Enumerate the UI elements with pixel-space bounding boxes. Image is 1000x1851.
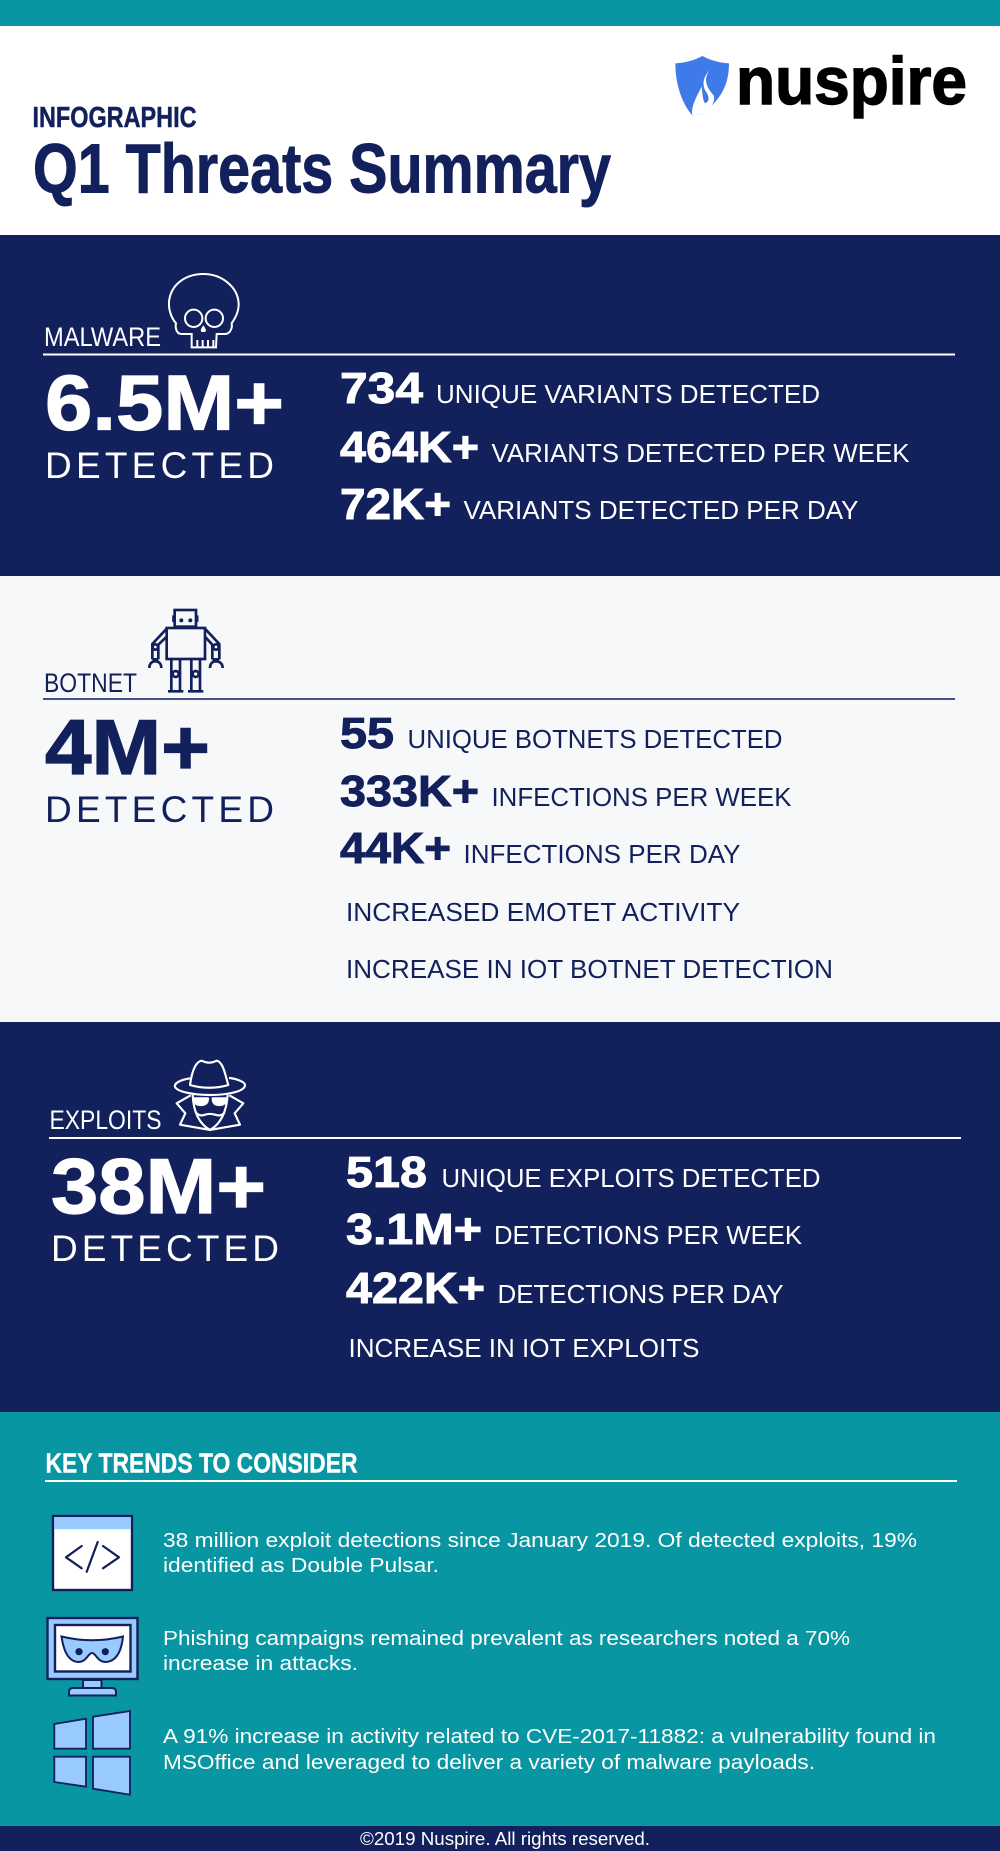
trend text: exploit detections: identified as Double Pulsar. [163,1554,439,1577]
icon: windows logo [54,1711,130,1795]
icon: skull [169,274,239,347]
logo wordmark: nuspire [736,44,967,119]
stat list: botnet [340,709,833,984]
trend text: CVE-2017-11882: A 91% increase in activity related to CVE-2017-11882: a vulnerability found in [163,1725,936,1748]
stat list: botnet: UNIQUE BOTNETS DETECTED [408,724,782,754]
heading: malware: MALWARE [44,322,161,352]
trend text: exploit detections: 38 million exploit detections since January 2019. Of detected exploits, 19% [163,1529,917,1552]
heading: key trends to consider: KEY TRENDS TO CONSIDER [46,1448,358,1478]
panel: exploits [0,1022,1000,1412]
icon: shield with flame [675,56,729,115]
header panel [0,26,1000,235]
stat list: botnet: 44K+ [340,824,451,873]
heading: exploits: EXPLOITS [50,1105,162,1135]
stat: total botnet detected [45,703,274,830]
stat list: botnet: INCREASED EMOTET ACTIVITY [346,897,740,927]
stat list: exploits: DETECTIONS PER DAY [498,1279,784,1309]
stat list: botnet: INFECTIONS PER WEEK [492,782,792,812]
footer: ©2019 Nuspire. All rights reserved. [360,1829,650,1849]
icon: phishing monitor [48,1618,138,1696]
stat list: exploits: UNIQUE EXPLOITS DETECTED [442,1163,820,1193]
stat list: malware: 72K+ [340,480,451,529]
trend text: phishing: increase in attacks. [163,1652,358,1675]
stat: total botnet detected: 4M+ [45,703,210,791]
trend text: phishing: Phishing campaigns remained prevalent as researchers noted a 70% [163,1627,850,1650]
stat list: botnet: 333K+ [340,767,479,816]
top teal band [0,0,1000,26]
footer [0,1826,1000,1851]
stat list: malware: VARIANTS DETECTED PER WEEK [492,438,910,468]
stat list: botnet: INCREASE IN IOT BOTNET DETECTION [346,954,833,984]
stat: total malware detected: 6.5M+ [45,358,284,446]
title: Q1 Threats Summary [33,130,611,208]
trend text: CVE-2017-11882 [163,1725,936,1774]
stat list: malware: 464K+ [340,423,479,472]
panel: botnet [0,576,1000,1022]
stat: total exploits detected: DETECTED [51,1228,279,1269]
stat list: exploits: 518 [346,1148,427,1197]
icon: robot [149,610,223,691]
header eyebrow: infographic: INFOGRAPHIC [32,102,197,134]
stat list: malware: 734 [340,364,424,413]
stat list: botnet: INFECTIONS PER DAY [464,839,740,869]
stat list: exploits: 3.1M+ [346,1205,482,1254]
icon: spy [175,1061,245,1130]
stat list: malware: VARIANTS DETECTED PER DAY [464,495,858,525]
stat list: exploits: 422K+ [346,1264,485,1313]
trend text: CVE-2017-11882: MSOffice and leveraged to deliver a variety of malware payloads. [163,1751,815,1774]
trend text: phishing [163,1627,850,1675]
panel: key trends [0,1412,1000,1826]
stat list: exploits: DETECTIONS PER WEEK [494,1220,803,1250]
stat: total malware detected: DETECTED [45,445,274,486]
panel: malware [0,235,1000,576]
stat list: botnet: 55 [340,709,394,758]
stat: total exploits detected: 38M+ [51,1142,266,1230]
stat list: malware: UNIQUE VARIANTS DETECTED [436,379,820,409]
stat list: malware [340,364,910,529]
stat: total malware detected [45,358,284,486]
stat: total botnet detected: DETECTED [45,789,274,830]
heading: botnet: BOTNET [44,668,137,698]
stat list: exploits: INCREASE IN IOT EXPLOITS [348,1333,700,1363]
trend text: exploit detections [163,1529,917,1577]
logo: nuspire [675,44,967,119]
icon: code window [53,1516,132,1590]
stat list: exploits [346,1148,820,1363]
stat: total exploits detected [51,1142,279,1269]
